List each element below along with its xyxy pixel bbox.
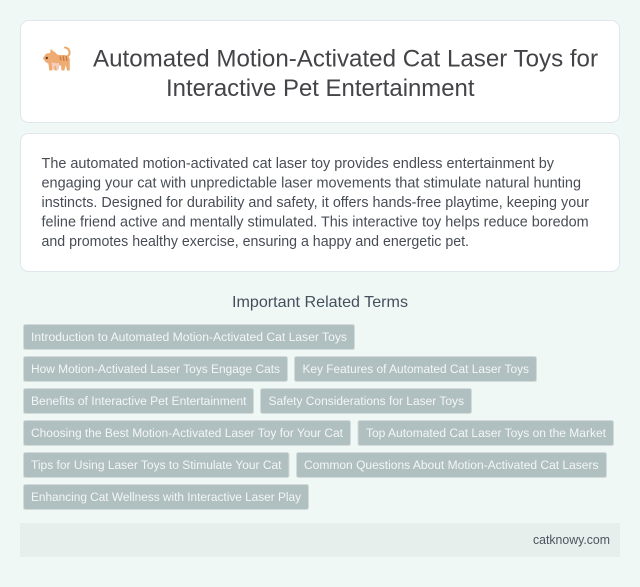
tag: [24, 484, 308, 510]
text block: description: The automated motion-activated cat laser toy provides endless entertainment by: [42, 155, 554, 172]
tag: [24, 452, 289, 478]
tag: [260, 388, 472, 414]
title: Interactive Pet Entertainment: [166, 75, 475, 102]
tag: Choosing the Best Motion-Activated Laser Toy for Your Cat: [31, 426, 344, 440]
text block: description: engaging your cat with unpredictable laser movements that stimulate natural hunting: [42, 174, 581, 192]
tag: [24, 420, 350, 446]
tag: Safety Considerations for Laser Toys: [268, 394, 464, 408]
tag: [294, 356, 536, 382]
tag: How Motion-Activated Laser Toys Engage Cats: [31, 362, 280, 376]
tag: Tips for Using Laser Toys to Stimulate Your Cat: [31, 458, 282, 472]
tag: [358, 420, 614, 446]
text block: description: feline friend active and mentally stimulated. This interactive toy helps reduce boredom: [42, 214, 589, 230]
title: Automated Motion-Activated Cat Laser Toys for: [93, 46, 598, 72]
panel: description card: [20, 134, 620, 272]
panel: title card: [20, 20, 620, 122]
title: [93, 46, 598, 102]
tag: Key Features of Automated Cat Laser Toys: [302, 362, 529, 376]
text block: description: and promotes healthy exercise, ensuring a happy and energetic pet.: [42, 233, 469, 250]
tag: Benefits of Interactive Pet Entertainment: [31, 394, 247, 408]
footer: [20, 523, 620, 557]
tag: Common Questions About Motion-Activated Cat Lasers: [304, 458, 598, 472]
tag: [24, 388, 254, 414]
tag: Enhancing Cat Wellness with Interactive Laser Play: [31, 490, 302, 504]
icon: cat: [43, 48, 70, 70]
tag: [24, 356, 288, 382]
heading: related terms: Important Related Terms: [232, 294, 408, 311]
text block: description: instincts. Designed for durability and safety, it offers hands-free playtime, keeping your: [42, 194, 589, 211]
related terms tags: [24, 324, 614, 510]
tag: Top Automated Cat Laser Toys on the Market: [366, 426, 607, 440]
tag: Introduction to Automated Motion-Activated Cat Laser Toys: [31, 330, 347, 344]
tag: [296, 452, 606, 478]
footer: site name: catknowy.com: [533, 533, 610, 547]
tag: [24, 324, 354, 350]
text block: description: [42, 155, 589, 250]
